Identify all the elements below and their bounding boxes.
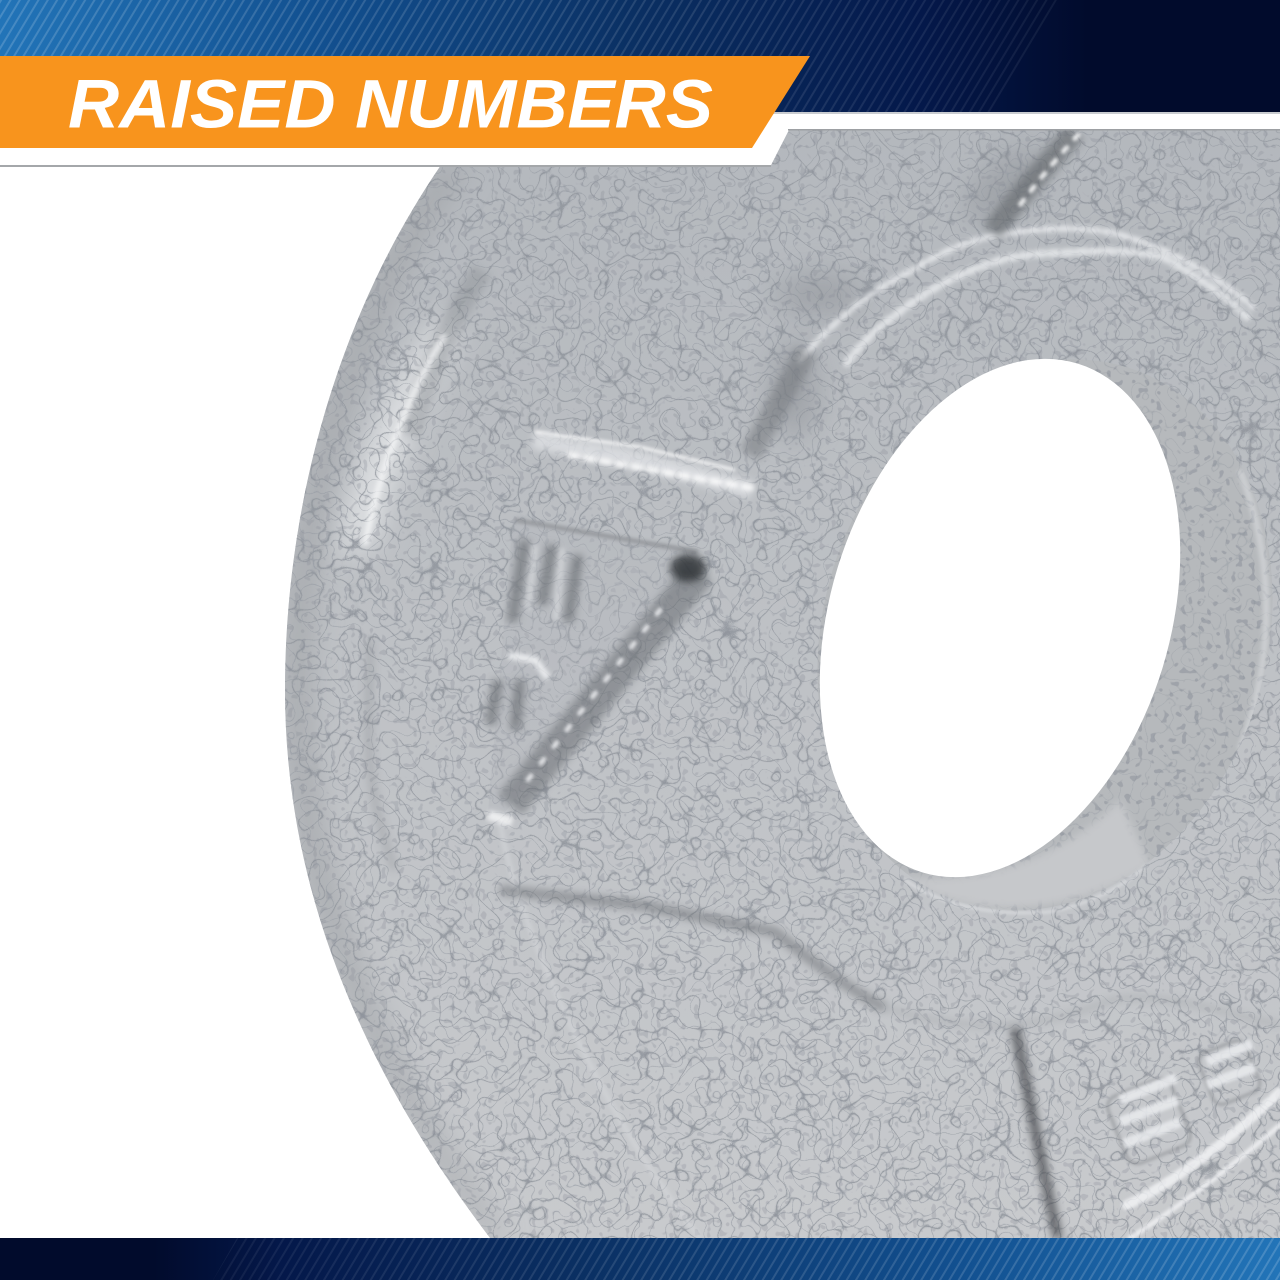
white divider strip under banner	[0, 128, 1280, 167]
raised digit marks	[490, 540, 578, 730]
outer rim shading	[285, 165, 505, 1238]
number recess triangle	[488, 520, 706, 822]
center hole opening	[760, 314, 1240, 922]
hub bottom shadow line	[885, 998, 1280, 1026]
top header band	[0, 0, 1280, 114]
hub ring inner highlight	[847, 251, 1247, 363]
hole wall lower bright face	[900, 800, 1150, 908]
upper diagonal seam	[992, 132, 1078, 232]
inner lip crease	[500, 820, 700, 1238]
orange title banner	[0, 56, 810, 148]
texture: second cell veins	[270, 125, 1280, 1245]
rim groove dark cells	[410, 270, 482, 435]
texture: small cell dots	[270, 125, 1280, 1245]
plate base surface	[270, 125, 1280, 1245]
hole inner wall	[818, 360, 1272, 916]
spoke ridge upper	[533, 432, 752, 490]
texture: coarse cell veins	[270, 125, 1280, 1245]
hub ring outer highlight	[800, 229, 1253, 360]
rim white glint	[365, 335, 445, 545]
photo: weight plate	[270, 125, 1280, 1245]
seam at hub left	[750, 352, 806, 455]
bottom spoke dark seam	[1015, 1028, 1058, 1238]
hub top dark patches	[770, 136, 1057, 440]
title: RAISED NUMBERS	[68, 66, 713, 142]
rim highlight band	[340, 310, 455, 560]
spoke lower edge crease	[500, 890, 885, 1008]
stamped bottom right lettering	[1104, 1038, 1280, 1238]
bottom footer band	[0, 1238, 1280, 1280]
